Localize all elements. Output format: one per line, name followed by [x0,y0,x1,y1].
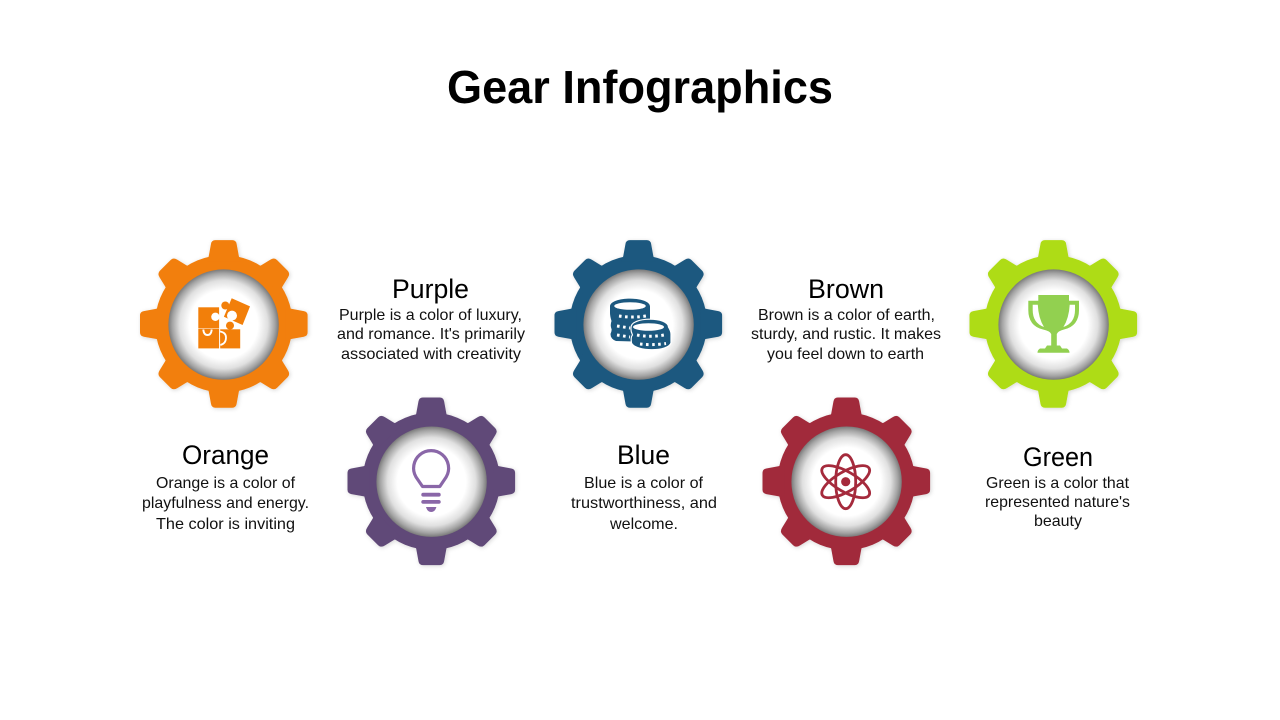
green gear hub [998,269,1109,380]
green gear body [970,240,1137,408]
description: blue: Blue is a color of [584,475,704,492]
text block: orange [142,440,309,533]
blue gear body [554,240,722,408]
icon: puzzle [198,298,250,348]
description: orange: The color is inviting [156,516,295,533]
icon: coins [610,299,671,350]
panel: blue gear [554,240,722,408]
text block: blue [571,440,717,533]
heading: brown: Brown [808,274,884,304]
text block: brown [751,274,941,363]
panel: purple gear [348,398,515,565]
purple gear hub [376,426,487,537]
description: orange: Orange is a color of [156,475,296,492]
description: brown: you feel down to earth [767,346,924,363]
red gear hub [791,426,902,537]
text block: purple [337,274,525,363]
description: purple [337,307,525,363]
description: brown: Brown is a color of earth, [758,307,935,324]
heading: green: Green [1023,442,1093,472]
heading: orange: Orange [182,440,269,470]
description: brown [751,307,941,363]
icon: trophy [1028,295,1079,353]
description: purple: Purple is a color of luxury, [339,307,522,324]
description: green [985,475,1130,530]
title: Gear Infographics [447,61,833,113]
orange gear hub [168,269,279,380]
description: orange: playfulness and energy. [142,495,309,512]
purple gear body [348,398,515,565]
red gear body [762,398,930,565]
panel: orange gear [140,240,308,408]
panel: green gear [970,240,1137,408]
description: green: beauty [1034,513,1082,530]
description: green: represented nature's [985,494,1130,511]
description: purple: and romance. It's primarily [337,326,525,343]
blue gear hub [583,269,694,380]
description: green: Green is a color that [986,475,1130,492]
description: blue: trustworthiness, and [571,495,717,512]
panel: red gear [762,398,930,565]
heading: purple: Purple [392,274,469,304]
description: blue [571,475,717,533]
heading: blue: Blue [617,440,670,470]
icon: light bulb [414,451,449,512]
description: brown: sturdy, and rustic. It makes [751,326,941,343]
description: purple: associated with creativity [341,346,521,363]
icon: atom [817,455,874,509]
description: blue: welcome. [609,516,678,533]
text block: green [985,442,1130,530]
orange gear body [140,240,308,408]
description: orange [142,475,309,533]
